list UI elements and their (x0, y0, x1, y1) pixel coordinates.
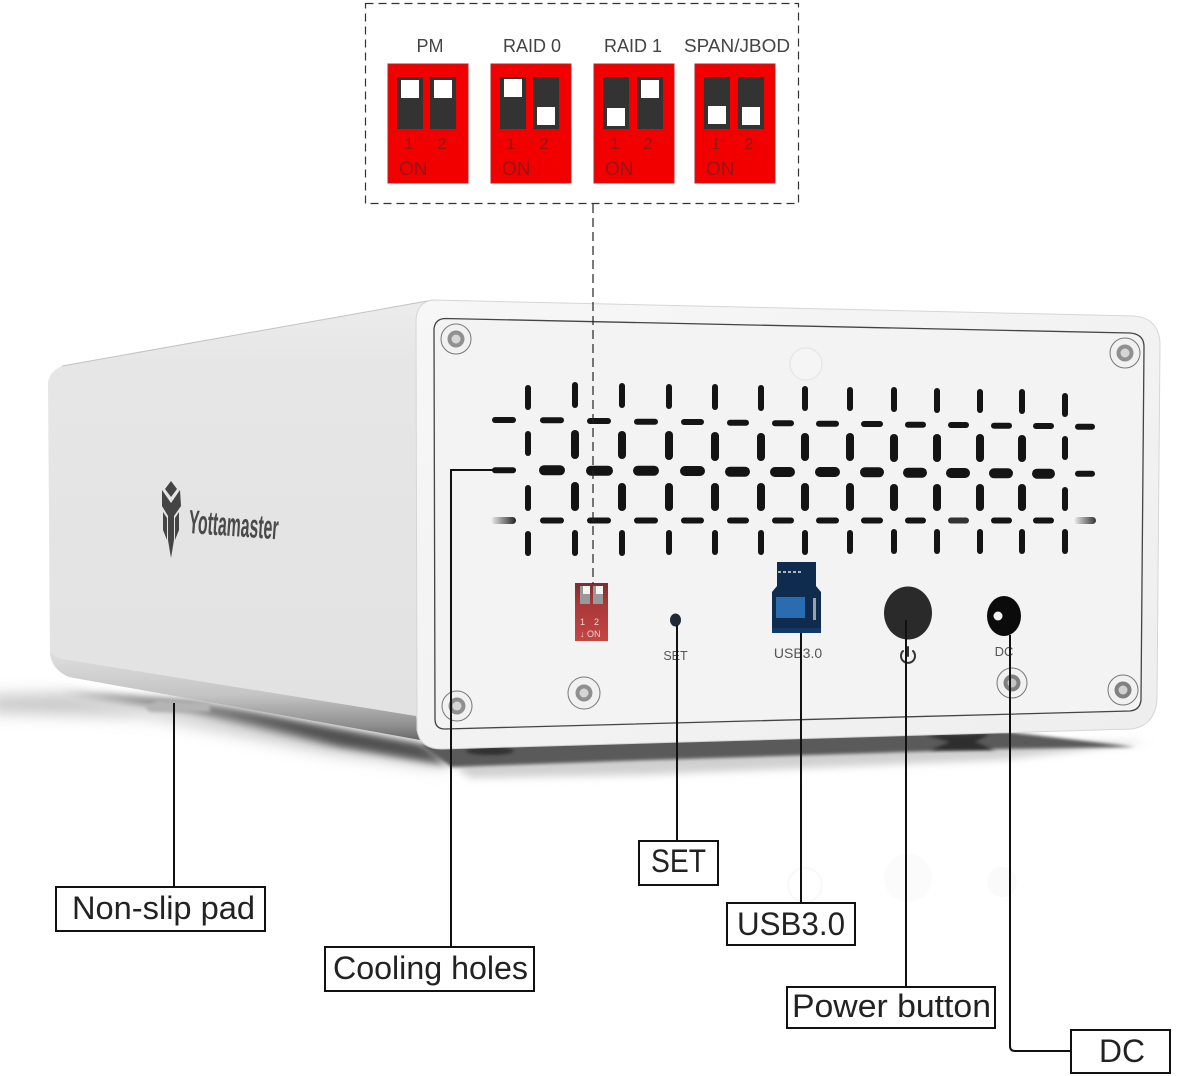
label: Non-slip pad: Non-slip pad (72, 890, 255, 926)
vertical slots row 3 (528, 486, 1065, 508)
label: SET (639, 841, 718, 885)
USB printed label: USB3.0 (774, 645, 822, 661)
switch: PM: 1 (405, 136, 414, 153)
leader line: SET (676, 625, 678, 841)
leader line: power button (905, 620, 907, 987)
logo mark (162, 481, 181, 558)
SET button hole (670, 614, 681, 626)
cooling holes grid (491, 385, 1096, 553)
switch: RAID 1: RAID 1 (604, 36, 662, 56)
screw top right (1110, 338, 1140, 368)
label: SET: SET (651, 843, 706, 879)
switch: SPAN/JBOD: ON (706, 159, 734, 180)
foot front left (466, 747, 514, 755)
panel: RAID mode legend (366, 4, 798, 204)
leader line: USB3.0 (800, 633, 802, 903)
dashed connector from switch to legend (592, 204, 594, 584)
screw top left (441, 324, 471, 354)
molded circle mark (790, 348, 822, 380)
logo wordmark: Yottamaster (187, 503, 280, 547)
switch: RAID 0 (491, 36, 571, 183)
switch: RAID 1: ON (605, 159, 634, 180)
switch: SPAN/JBOD (684, 36, 790, 183)
switch: RAID 0: 1 (507, 136, 516, 153)
screw bottom left (442, 691, 472, 721)
screw bottom right (1108, 675, 1138, 705)
SET printed label: SET (663, 649, 688, 663)
DIP switch on panel (575, 583, 608, 641)
USB 3.0 port (772, 562, 821, 633)
DIP on mark: ↓ ON (580, 629, 601, 639)
switch: SPAN/JBOD: SPAN/JBOD (684, 36, 790, 56)
switch: PM: ON (399, 159, 428, 180)
label: DC (1071, 1030, 1170, 1073)
DC jack (987, 596, 1021, 636)
switch: SPAN/JBOD: 1 (712, 136, 721, 153)
switch: RAID 0: ON (502, 159, 530, 180)
switch: PM (388, 36, 468, 183)
DIP switch on panel: 2 (594, 617, 599, 627)
leader line: DC (1010, 635, 1071, 1051)
vertical slots row 4 (528, 532, 1065, 553)
DC printed label: DC (995, 644, 1013, 659)
screw by DC (997, 668, 1027, 698)
switch: RAID 1: 1 (611, 136, 620, 153)
label: USB3.0: USB3.0 (737, 906, 845, 942)
faint floor reflection (788, 854, 1017, 902)
horizontal slots row 1 (495, 420, 1092, 427)
filled end slots (491, 517, 1096, 524)
vertical slots row 2 (528, 434, 1065, 458)
leader line: non-slip pad (173, 703, 175, 887)
screw bottom center (568, 677, 600, 709)
horizontal slots middle row (495, 470, 1092, 474)
logo (162, 481, 280, 558)
label: Power button: Power button (792, 988, 991, 1024)
switch: RAID 0: 2 (540, 136, 549, 153)
power icon (901, 647, 915, 663)
DIP numbers: 1 (580, 617, 585, 627)
switch: SPAN/JBOD: 2 (745, 136, 754, 153)
label: Cooling holes: Cooling holes (333, 950, 528, 986)
ground shadow under the enclosure (0, 692, 1150, 778)
leader line: cooling holes (451, 470, 516, 947)
label: DC: DC (1099, 1033, 1145, 1069)
power button (884, 586, 932, 640)
switch: PM: 2 (438, 136, 447, 153)
switch: RAID 1: 2 (644, 136, 653, 153)
horizontal slots row 3 (543, 518, 1051, 524)
switch: RAID 1 (594, 36, 674, 183)
foot front right (925, 734, 995, 750)
panel: enclosure side (48, 300, 433, 740)
panel: enclosure rear plate (416, 300, 1160, 749)
non-slip foot left (145, 700, 210, 712)
vertical slots row 1 (528, 385, 1065, 414)
switch: PM: PM (416, 36, 444, 56)
switch: RAID 0: RAID 0 (503, 36, 561, 56)
